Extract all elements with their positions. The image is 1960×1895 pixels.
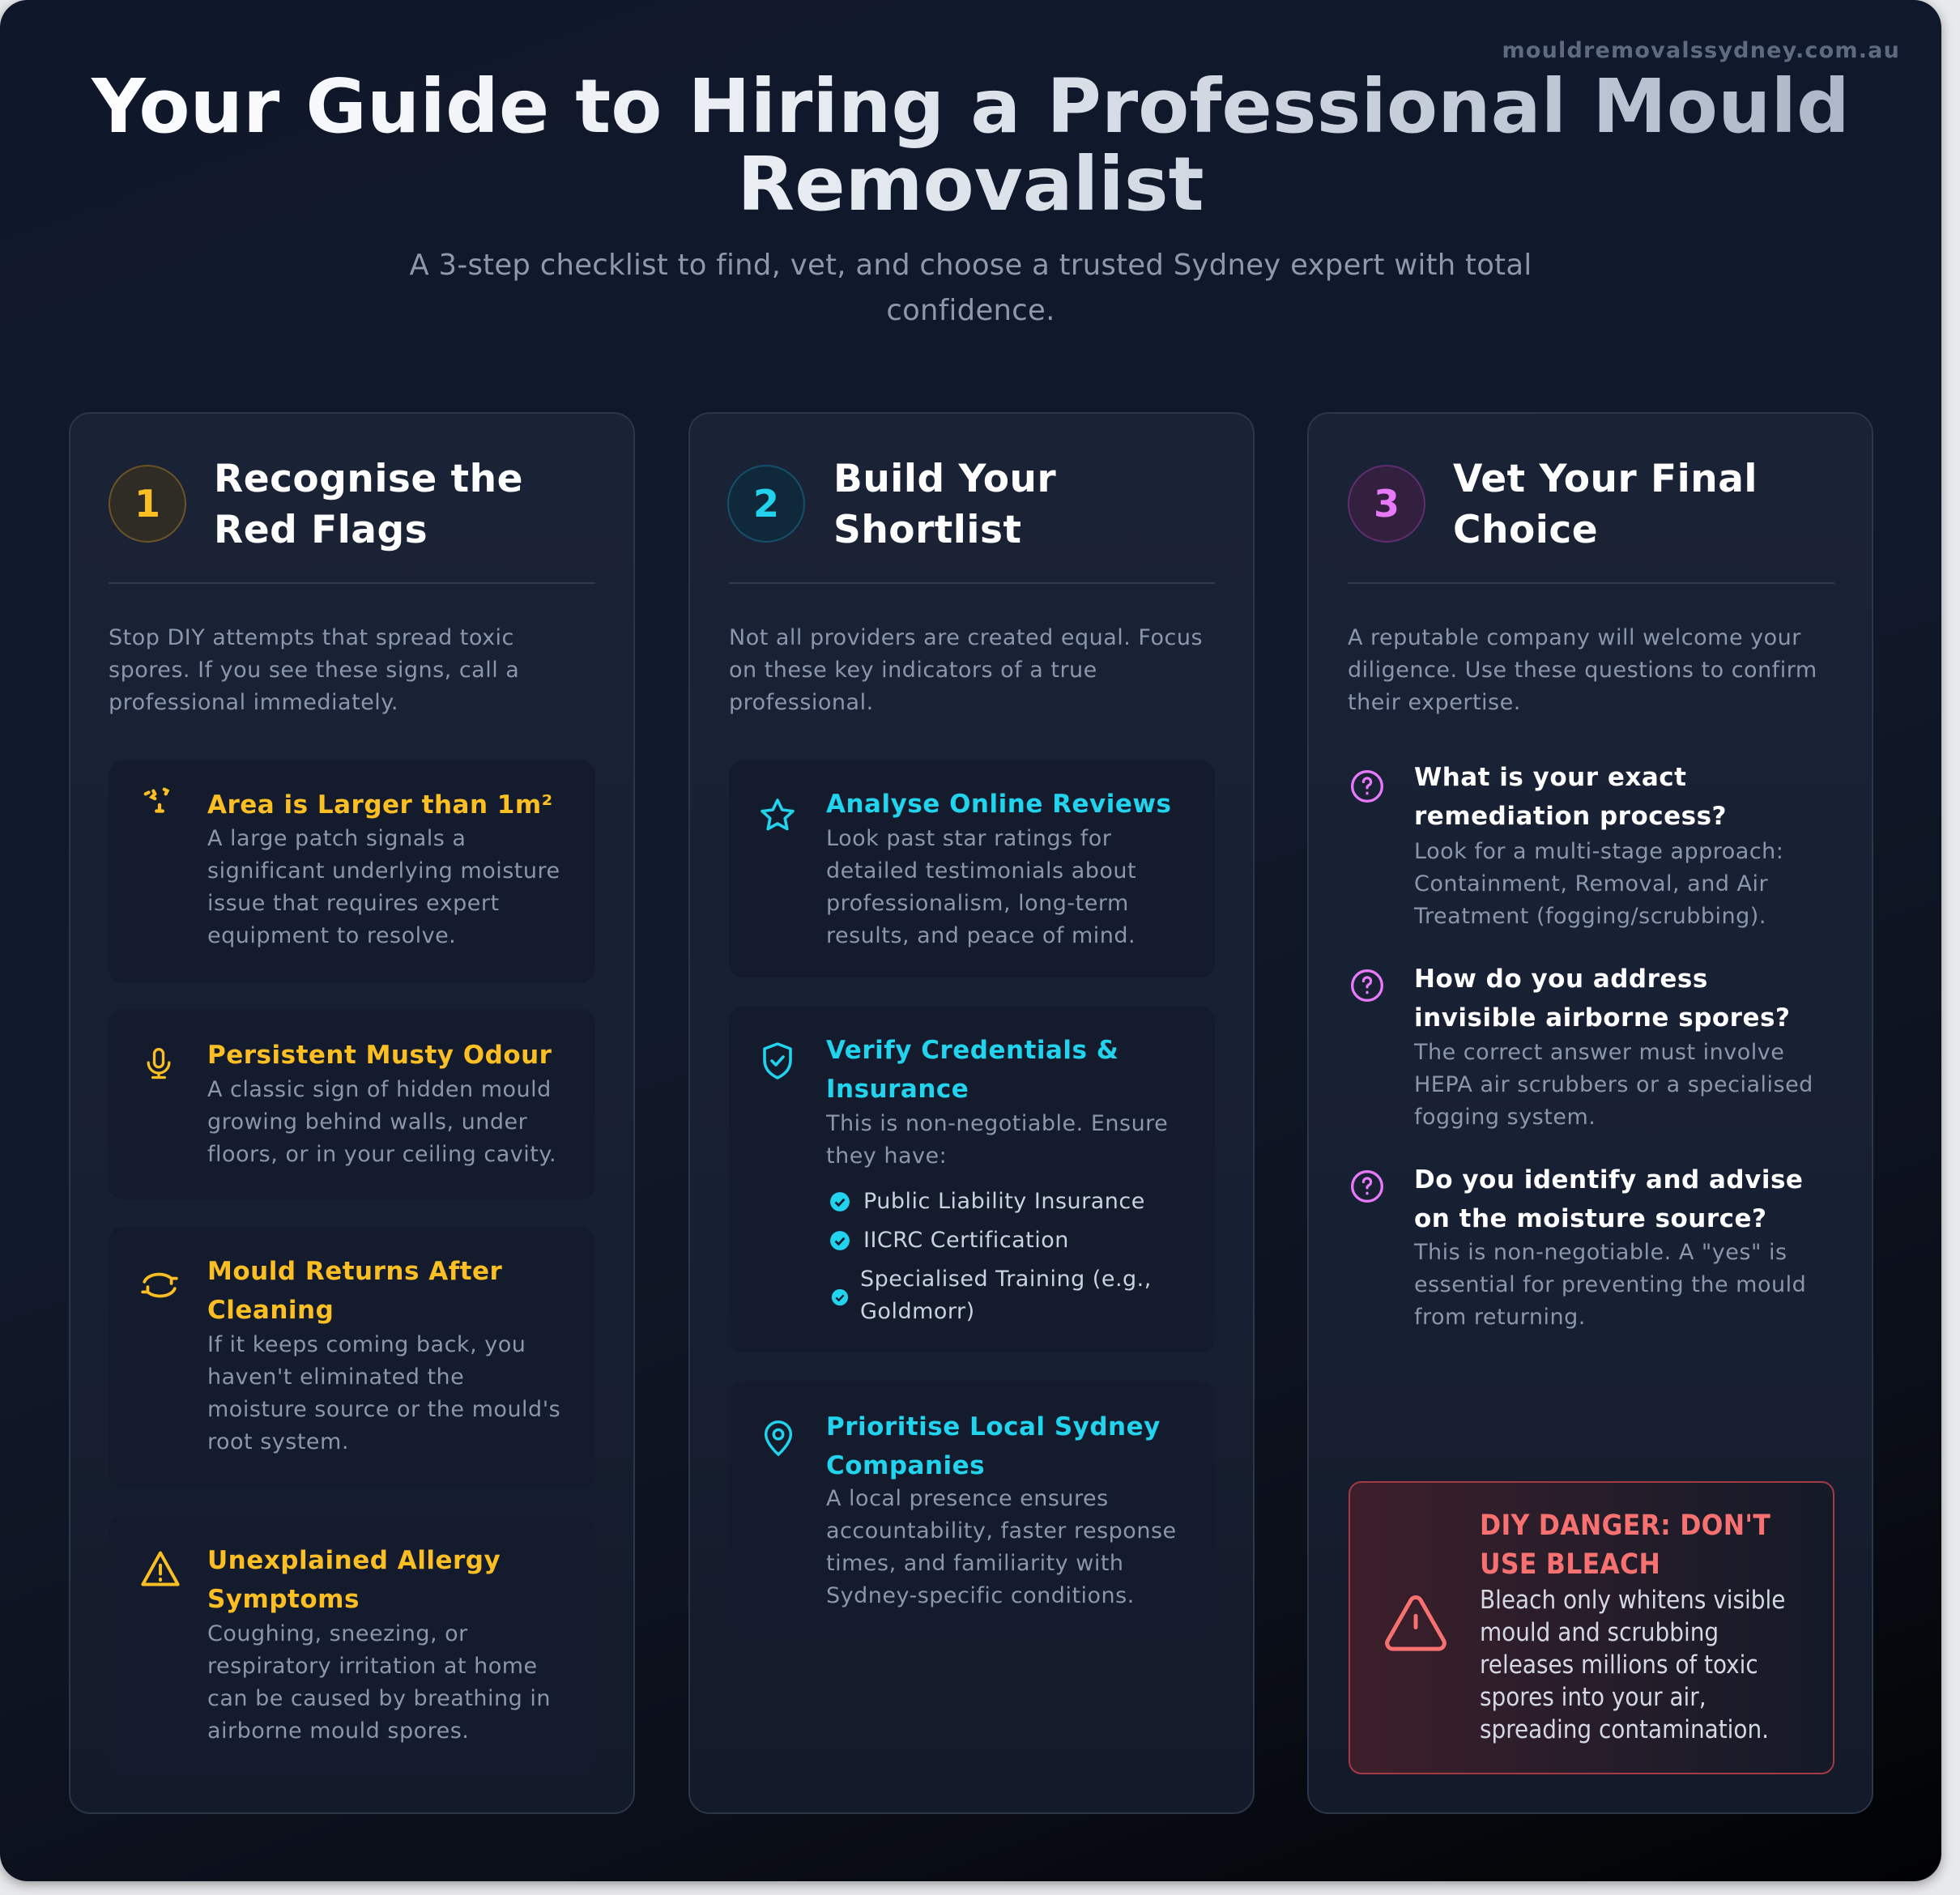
icon: warning [141, 1552, 180, 1586]
step 1 intro [109, 625, 519, 715]
item: allergy symptoms: Symptoms [207, 1585, 360, 1614]
item: local companies: Sydney-specific conditions. [826, 1583, 1135, 1608]
question 3: from returning. [1414, 1305, 1586, 1330]
item: local companies [729, 1382, 1215, 1639]
item: persistent musty odour: growing behind walls, under [207, 1109, 527, 1135]
panel: step 1 recognise red flags [69, 412, 635, 1814]
question 2: HEPA air scrubbers or a specialised [1414, 1072, 1813, 1097]
item: persistent musty odour: floors, or in your ceiling cavity. [207, 1142, 556, 1167]
step 2 intro [729, 625, 1203, 715]
question 1: remediation process? [1414, 802, 1727, 831]
step 3 heading [1453, 457, 1758, 552]
step 3 number [1348, 465, 1425, 543]
item: mould returns [109, 1227, 595, 1488]
step 1 heading: Recognise the [214, 457, 523, 501]
icon: map pin [765, 1420, 792, 1456]
callout: DIY danger: mould and scrubbing [1480, 1618, 1719, 1647]
item: area larger than 1m2: equipment to resolve. [207, 923, 456, 948]
item: online reviews [729, 760, 1215, 977]
step 2 heading: Build Your [833, 457, 1056, 501]
item: area larger than 1m2: significant underlying moisture [207, 858, 560, 884]
question 1: Containment, Removal, and Air [1414, 871, 1768, 896]
icon: star [761, 798, 795, 831]
question 2: invisible airborne spores? [1414, 1003, 1790, 1033]
checklist: Specialised Training (e.g., [860, 1267, 1152, 1292]
icon: warning triangle [1385, 1595, 1447, 1651]
step 2 number [727, 465, 805, 543]
item: online reviews: Analyse Online Reviews [826, 790, 1171, 819]
question 1: Treatment (fogging/scrubbing). [1414, 904, 1766, 929]
step 1 intro: spores. If you see these signs, call a [109, 658, 519, 683]
question 3: This is non-negotiable. A "yes" is [1414, 1240, 1787, 1265]
icon: shield check [763, 1042, 792, 1080]
item: persistent musty odour: Persistent Musty Odour [207, 1041, 552, 1070]
item: credentials: Insurance [826, 1075, 969, 1104]
step 2 intro: Not all providers are created equal. Focus [729, 625, 1203, 650]
step 2 heading [833, 457, 1056, 552]
item: online reviews: Look past star ratings for [826, 826, 1111, 851]
item: local companies: Prioritise Local Sydney [826, 1412, 1161, 1441]
question 3: essential for preventing the mould [1414, 1272, 1806, 1297]
icon: spread [144, 787, 170, 813]
item: online reviews: professionalism, long-term [826, 891, 1129, 916]
icon: question [1351, 1170, 1383, 1203]
callout: DIY danger: spreading contamination. [1480, 1715, 1769, 1744]
question 3: Do you identify and advise [1414, 1165, 1803, 1194]
item: allergy symptoms: respiratory irritation at home [207, 1654, 538, 1679]
checklist: Goldmorr) [860, 1299, 975, 1324]
subtitle: confidence. [886, 294, 1055, 327]
icon: question [1351, 770, 1383, 803]
step 3 intro: diligence. Use these questions to confirm [1348, 658, 1817, 683]
callout: DIY danger: releases millions of toxic [1480, 1650, 1758, 1680]
item: area larger than 1m2: issue that requires expert [207, 891, 500, 916]
item: credentials: they have: [826, 1143, 947, 1169]
item: persistent musty odour: A classic sign of hidden mould [207, 1077, 552, 1102]
icon: microphone [147, 1048, 170, 1079]
title: Removalist [737, 141, 1204, 228]
step 2 heading: Shortlist [833, 508, 1021, 552]
callout: DIY danger: USE BLEACH [1480, 1548, 1660, 1581]
step 2 number: 2 [753, 482, 779, 526]
step 3 intro: their expertise. [1348, 690, 1521, 715]
item: local companies: A local presence ensures [826, 1486, 1109, 1511]
item: credentials [729, 1007, 1215, 1352]
checklist: IICRC Certification [863, 1228, 1069, 1253]
step 3 heading: Choice [1453, 508, 1598, 552]
item: mould returns: Mould Returns After [207, 1257, 502, 1286]
item: local companies: times, and familiarity with [826, 1551, 1124, 1576]
item: local companies: Companies [826, 1451, 985, 1480]
item: mould returns: Cleaning [207, 1296, 334, 1325]
checklist: Public Liability Insurance [863, 1189, 1145, 1214]
question 1 [1351, 763, 1783, 929]
callout: DIY danger: spores into your air, [1480, 1683, 1706, 1712]
item: allergy symptoms [109, 1515, 595, 1775]
item: credentials: This is non-negotiable. Ensure [826, 1111, 1168, 1136]
question 2 [1351, 965, 1813, 1130]
question 2: The correct answer must involve [1414, 1040, 1784, 1065]
item: credentials: Verify Credentials & [826, 1036, 1118, 1065]
title: Your Guide to Hiring a Professional Mould [92, 63, 1850, 150]
item: area larger than 1m2 [109, 760, 595, 983]
step 1 intro: Stop DIY attempts that spread toxic [109, 625, 514, 650]
step 1 number: 1 [134, 482, 160, 526]
step 1 heading: Red Flags [214, 508, 428, 552]
website url: mouldremovalssydney.com.au [1502, 38, 1900, 63]
question 1: Look for a multi-stage approach: [1414, 839, 1783, 864]
callout: DIY danger: DIY DANGER: DON'T [1480, 1510, 1770, 1542]
question 2: fogging system. [1414, 1105, 1596, 1130]
item: online reviews: detailed testimonials about [826, 858, 1136, 884]
subtitle [410, 249, 1532, 327]
callout: DIY danger: Bleach only whitens visible [1480, 1586, 1785, 1615]
item: mould returns: moisture source or the mould's [207, 1397, 560, 1422]
item: area larger than 1m2: A large patch signals a [207, 826, 466, 851]
item: allergy symptoms: Unexplained Allergy [207, 1546, 501, 1575]
step 3 intro [1348, 625, 1817, 715]
step 1 intro: professional immediately. [109, 690, 398, 715]
icon: refresh [141, 1273, 178, 1297]
question 1: What is your exact [1414, 763, 1686, 792]
panel: step 3 vet final choice [1307, 412, 1873, 1814]
title [0, 68, 1941, 224]
item: local companies: accountability, faster response [826, 1518, 1177, 1544]
question 2: How do you address [1414, 965, 1708, 994]
item: allergy symptoms: can be caused by breathing in [207, 1686, 551, 1711]
step 2 intro: on these key indicators of a true [729, 658, 1097, 683]
panel: step 2 build shortlist [688, 412, 1255, 1814]
step 2 intro: professional. [729, 690, 874, 715]
step 1 heading [214, 457, 523, 552]
checklist [830, 1189, 1152, 1324]
item: allergy symptoms: Coughing, sneezing, or [207, 1621, 468, 1646]
step 1 number [109, 465, 186, 543]
item: allergy symptoms: airborne mould spores. [207, 1718, 469, 1744]
item: area larger than 1m2: Area is Larger than 1m² [207, 790, 553, 820]
question 3: on the moisture source? [1414, 1204, 1767, 1233]
icon: question [1351, 969, 1383, 1002]
step 3 heading: Vet Your Final [1453, 457, 1758, 501]
callout: DIY danger [1349, 1481, 1834, 1774]
item: mould returns: haven't eliminated the [207, 1365, 464, 1390]
question 3 [1351, 1165, 1806, 1330]
subtitle: A 3-step checklist to find, vet, and choose a trusted Sydney expert with total [410, 249, 1532, 282]
item: persistent musty odour [109, 1009, 595, 1199]
item: mould returns: root system. [207, 1429, 349, 1454]
step 3 intro: A reputable company will welcome your [1348, 625, 1801, 650]
item: online reviews: results, and peace of mind. [826, 923, 1136, 948]
item: mould returns: If it keeps coming back, you [207, 1332, 526, 1357]
step 3 number: 3 [1374, 482, 1400, 526]
